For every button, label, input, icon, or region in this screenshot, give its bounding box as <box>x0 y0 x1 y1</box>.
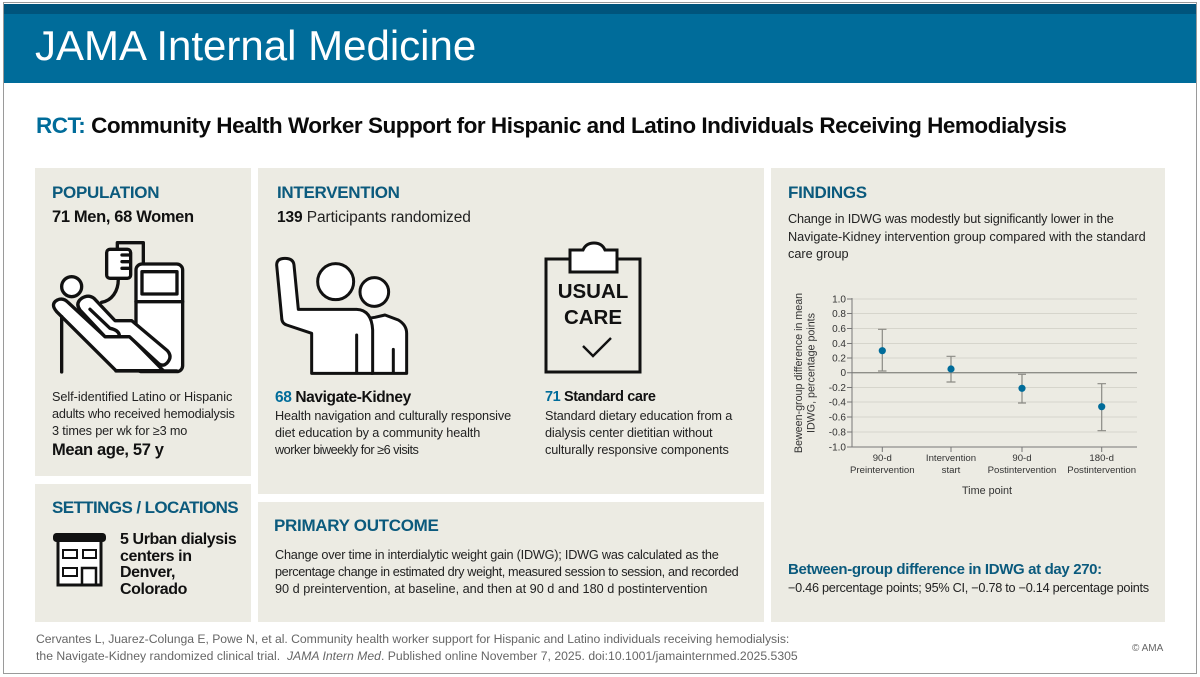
citation <box>36 632 798 662</box>
population count: 71 Men, 68 Women <box>52 208 194 226</box>
primary outcome text: 90 d preintervention, at baseline, and then at 90 d and 180 d postintervention <box>275 582 707 596</box>
findings result heading: Between-group difference in IDWG at day 270: <box>788 561 1102 578</box>
navigate-kidney description: worker biweekly for ≥6 visits <box>275 443 418 457</box>
findings result values: −0.46 percentage points; 95% CI, −0.78 to −0.14 percentage points <box>788 581 1149 595</box>
header top band <box>4 4 1196 14</box>
header banner <box>4 4 1196 83</box>
chart: between-group difference: 0.8 <box>832 309 846 320</box>
intervention heading: INTERVENTION <box>277 183 400 202</box>
chart: between-group difference: -0.8 <box>829 428 846 438</box>
standard care description: culturally responsive components <box>545 443 729 457</box>
navigate-kidney description: Health navigation and culturally responsive <box>275 409 511 423</box>
chart: between-group difference <box>793 293 1137 497</box>
panel: population <box>35 168 251 476</box>
journal title: JAMA Internal Medicine <box>35 22 476 69</box>
icon: building <box>53 533 106 586</box>
population heading: POPULATION <box>52 183 159 202</box>
standard care label: 71 Standard care <box>545 389 655 405</box>
chart: between-group difference: start <box>942 465 961 476</box>
primary outcome heading: PRIMARY OUTCOME <box>274 516 439 535</box>
chart: between-group difference: -0.4 <box>829 398 846 408</box>
chart: between-group difference: Preintervention <box>850 465 915 476</box>
chart: between-group difference: 90-d <box>873 453 892 464</box>
findings summary: Navigate-Kidney intervention group compared with the standard <box>788 230 1146 244</box>
primary outcome text <box>275 548 738 596</box>
navigate-kidney description: diet education by a community health <box>275 426 480 440</box>
chart: between-group difference: -0.2 <box>829 383 846 394</box>
chart: between-group difference: Postintervention <box>988 465 1056 476</box>
randomized count: 139 Participants randomized <box>277 209 471 226</box>
chart: between-group difference: -1.0 <box>829 442 846 454</box>
icon: community health worker and patient <box>275 256 408 375</box>
chart: between-group difference: 0.6 <box>832 324 846 335</box>
chart: between-group difference: Time point <box>962 485 1012 497</box>
population description: adults who received hemodialysis <box>52 407 235 421</box>
population description <box>52 390 235 438</box>
settings text <box>120 531 236 598</box>
standard care description: dialysis center dietitian without <box>545 426 712 440</box>
chart: between-group difference: 180-d <box>1089 453 1114 464</box>
population description: 3 times per wk for ≥3 mo <box>52 424 187 438</box>
standard care description: Standard dietary education from a <box>545 409 732 423</box>
panel: settings and locations <box>35 484 251 622</box>
settings text: centers in <box>120 548 192 565</box>
chart: between-group difference: Beween-group difference in mean <box>793 293 805 453</box>
copyright: © AMA <box>1132 643 1163 654</box>
navigate-kidney description <box>275 409 511 457</box>
icon: patient on dialysis <box>52 241 184 374</box>
mean age: Mean age, 57 y <box>52 441 164 459</box>
panel: intervention <box>258 168 764 494</box>
citation: the Navigate-Kidney randomized clinical trial. JAMA Intern Med. Published online November 7, 2025. doi:10.1001/jamainternmed.2025.5305 <box>36 648 798 662</box>
panel: primary outcome <box>258 502 764 622</box>
primary outcome text: percentage change in estimated dry weight, measured session to session, and recorded <box>275 565 738 579</box>
findings heading: FINDINGS <box>788 183 867 202</box>
population description: Self-identified Latino or Hispanic <box>52 390 232 404</box>
settings text: Colorado <box>120 581 187 598</box>
citation: Cervantes L, Juarez-Colunga E, Powe N, et al. Community health worker support for Hispanic and Latino individuals receiving hemodialysis: <box>36 632 789 646</box>
standard care description <box>545 409 732 457</box>
chart: between-group difference: 0 <box>840 368 846 379</box>
icon: usual care clipboard: CARE <box>564 306 622 329</box>
chart: between-group difference: IDWG, percentage points <box>806 313 818 433</box>
chart: between-group difference: Postintervention <box>1067 465 1136 476</box>
findings summary: care group <box>788 247 849 261</box>
settings text: 5 Urban dialysis <box>120 531 236 548</box>
chart: between-group difference: 0.2 <box>832 354 846 364</box>
primary outcome text: Change over time in interdialytic weight gain (IDWG); IDWG was calculated as the <box>275 548 719 562</box>
chart: between-group difference: 1.0 <box>832 294 846 306</box>
settings text: Denver, <box>120 564 175 581</box>
icon: usual care clipboard <box>544 242 642 374</box>
chart: between-group difference: 0.4 <box>832 339 846 350</box>
settings heading: SETTINGS / LOCATIONS <box>52 498 238 517</box>
chart: between-group difference: Intervention <box>926 453 976 464</box>
findings summary <box>788 212 1146 261</box>
chart: between-group difference: 90-d <box>1012 453 1032 464</box>
clipboard text: USUAL <box>558 280 628 303</box>
navigate-kidney group label: 68 Navigate-Kidney <box>275 389 411 406</box>
chart: between-group difference: -0.6 <box>829 412 846 424</box>
main title: RCT: Community Health Worker Support for Hispanic and Latino Individuals Receiving Hemodialysis <box>36 113 1066 138</box>
findings summary: Change in IDWG was modestly but significantly lower in the <box>788 212 1114 226</box>
panel: findings <box>771 168 1165 622</box>
